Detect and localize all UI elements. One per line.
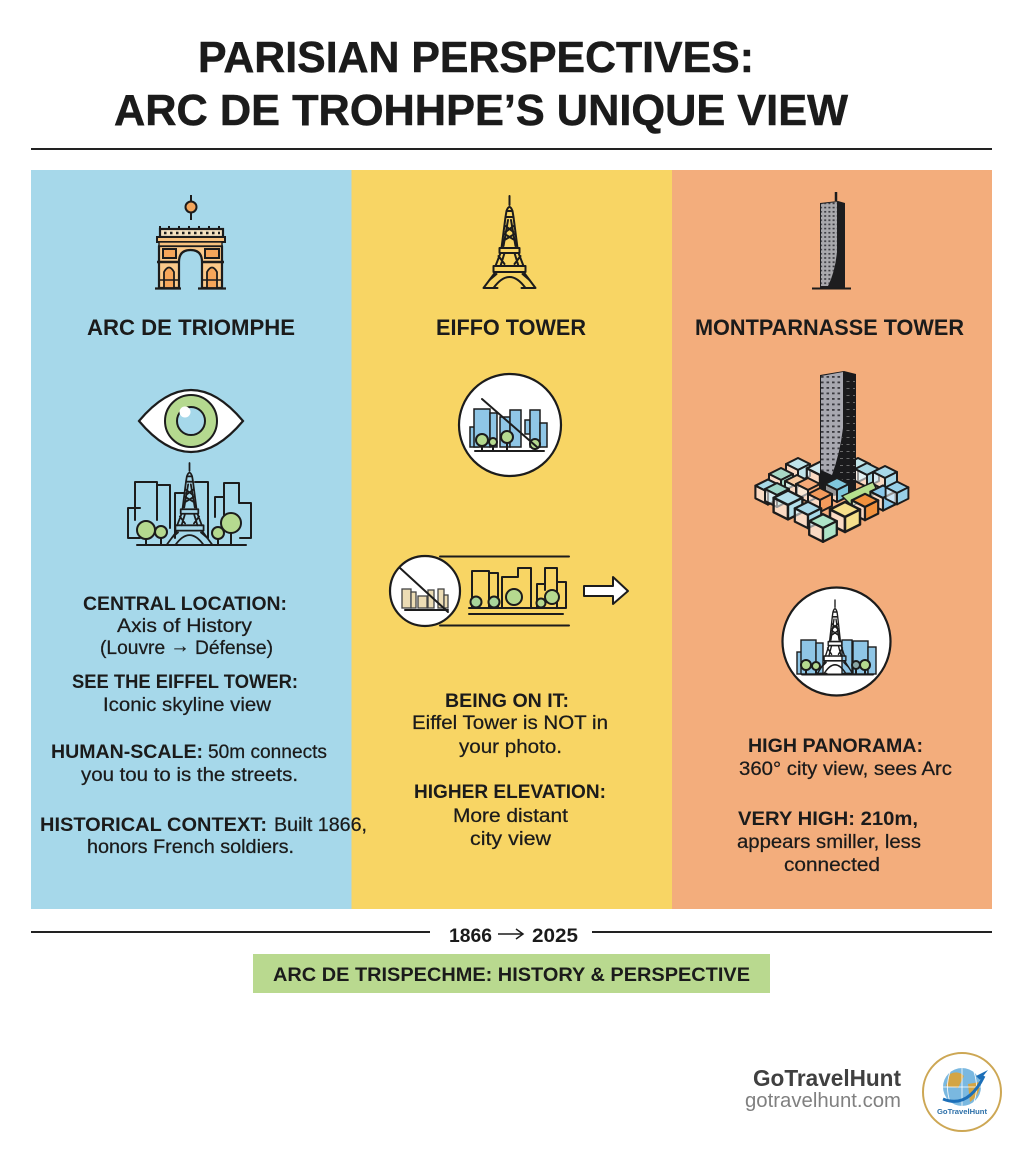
icon: skyline with Eiffel Tower bbox=[128, 463, 251, 545]
heading: Montparnasse Tower: MONTPARNASSE TOWER bbox=[695, 315, 964, 340]
timeline: 2025 bbox=[532, 925, 578, 947]
text: high panorama: 360° city view, sees Arc bbox=[739, 758, 952, 780]
text: human-scale: you tou to is the streets. bbox=[81, 764, 298, 786]
text: very high: appears smiller, less bbox=[737, 831, 921, 853]
text: historical context bbox=[40, 814, 367, 858]
text: being on it bbox=[412, 690, 608, 758]
panel: Arc de Triomphe bbox=[31, 170, 367, 909]
icon: crossed-out skyline in circle bbox=[459, 374, 561, 476]
text: high panorama: HIGH PANORAMA: bbox=[748, 735, 923, 757]
text: human-scale: HUMAN-SCALE: bbox=[51, 741, 203, 763]
text: higher elevation: HIGHER ELEVATION: bbox=[414, 781, 606, 803]
text: central location: Défense) bbox=[190, 637, 273, 659]
text: central location: CENTRAL LOCATION: bbox=[83, 593, 287, 615]
text: very high: VERY HIGH: 210m, bbox=[738, 808, 918, 830]
text: higher elevation: city view bbox=[470, 828, 552, 850]
text: human-scale bbox=[51, 741, 327, 786]
panel: Montparnasse Tower bbox=[672, 170, 992, 909]
icon: Montparnasse Tower over city blocks bbox=[755, 371, 908, 542]
title bbox=[114, 33, 848, 135]
icon: view from the tower with arrow bbox=[390, 556, 628, 626]
icon: Montparnasse Tower bbox=[812, 192, 851, 288]
banner: ARC DE TRISPECHME: HISTORY & PERSPECTIVE bbox=[273, 964, 750, 986]
text: being on it: Eiffel Tower is NOT in bbox=[412, 712, 608, 734]
heading: Eiffel Tower: EIFFO TOWER bbox=[436, 315, 586, 340]
text: higher elevation bbox=[414, 781, 606, 850]
timeline: 1866 bbox=[449, 925, 492, 947]
icon: Arc de Triomphe bbox=[155, 195, 226, 288]
text: see the Eiffel Tower bbox=[72, 671, 298, 716]
text: central location: Axis of History bbox=[117, 615, 252, 637]
text: high panorama bbox=[739, 735, 952, 780]
panel: Eiffel Tower bbox=[351, 170, 672, 909]
text: historical context: HISTORICAL CONTEXT: bbox=[40, 814, 267, 836]
text: very high: connected bbox=[784, 854, 880, 876]
icon: Eiffel Tower skyline in circle bbox=[782, 588, 890, 696]
text: being on it: BEING ON IT: bbox=[445, 690, 569, 712]
text: being on it: your photo. bbox=[459, 736, 562, 758]
arrow bbox=[584, 577, 628, 604]
icon: Eiffel Tower bbox=[484, 196, 536, 288]
timeline bbox=[31, 925, 992, 947]
title: PARISIAN PERSPECTIVES: bbox=[198, 33, 754, 82]
text: see the Eiffel Tower: Iconic skyline view bbox=[103, 694, 272, 716]
brand name: gotravelhunt.com bbox=[745, 1090, 901, 1112]
heading: Arc de Triomphe: ARC DE TRIOMPHE bbox=[87, 315, 295, 340]
text: central location: → bbox=[170, 635, 190, 657]
text: human-scale: 50m connects bbox=[208, 741, 327, 763]
text: historical context: Built 1866, bbox=[274, 814, 367, 836]
text: higher elevation: More distant bbox=[453, 805, 569, 827]
banner bbox=[253, 954, 770, 993]
text: see the Eiffel Tower: SEE THE EIFFEL TOWER: bbox=[72, 671, 298, 693]
brand name: GoTravelHunt bbox=[753, 1065, 901, 1091]
text: very high bbox=[737, 808, 921, 876]
text: historical context: honors French soldiers. bbox=[87, 836, 294, 858]
brand name bbox=[745, 1065, 901, 1112]
icon: eye bbox=[139, 390, 243, 452]
title: ARC DE TROHHPE’S UNIQUE VIEW bbox=[114, 86, 848, 135]
logo bbox=[923, 1053, 1001, 1131]
text: central location bbox=[83, 593, 287, 659]
logo: GoTravelHunt bbox=[937, 1107, 987, 1116]
text: central location: (Louvre bbox=[100, 637, 166, 659]
